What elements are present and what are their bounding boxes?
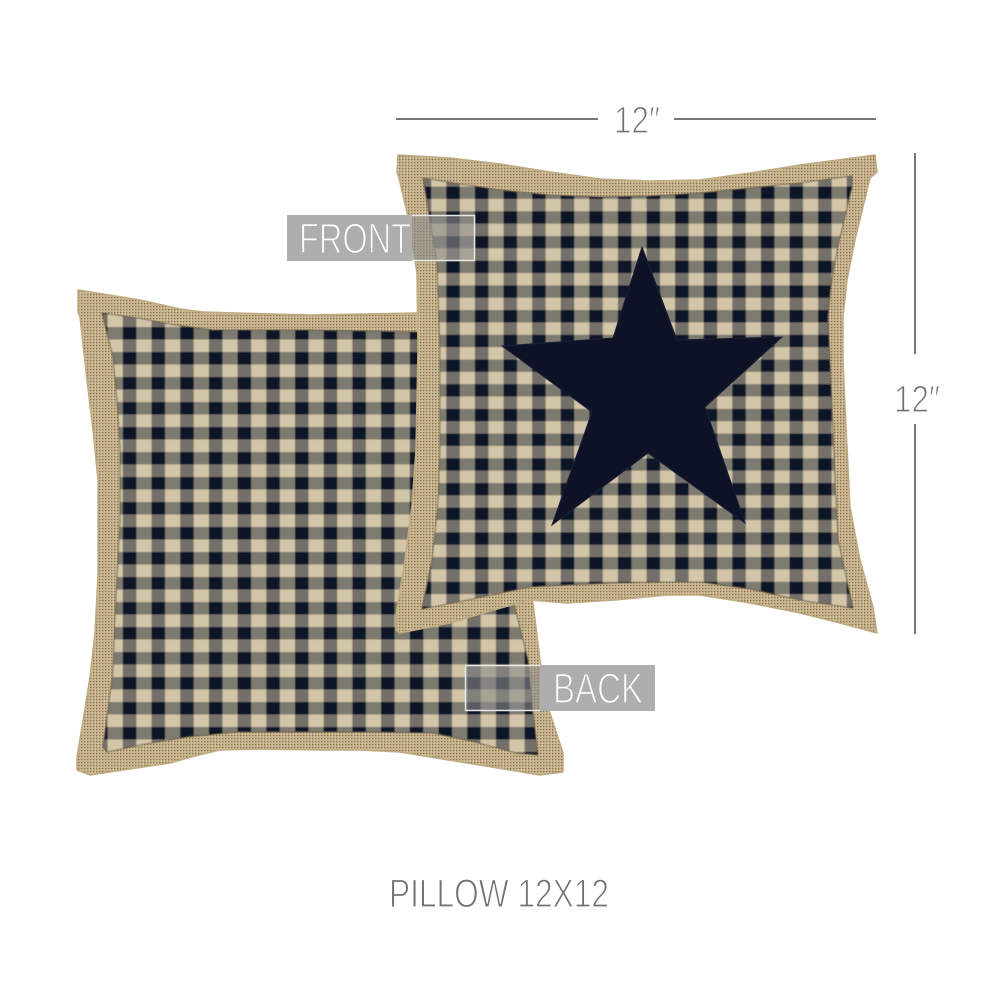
height label: 12″ — [894, 379, 940, 421]
width label: 12″ — [614, 100, 660, 142]
pillow: back view — [77, 290, 563, 775]
label: back: BACK — [553, 665, 643, 713]
pillow: front view — [396, 155, 877, 633]
label: back — [465, 665, 655, 713]
back pillow gingham fabric — [102, 313, 538, 755]
label: front: FRONT — [299, 215, 411, 263]
icon: navy star applique — [502, 247, 782, 525]
front pillow gingham fabric — [422, 176, 853, 609]
front pillow burlap border — [396, 155, 877, 633]
back pillow burlap border — [77, 290, 563, 775]
caption: PILLOW 12X12 — [389, 872, 609, 916]
